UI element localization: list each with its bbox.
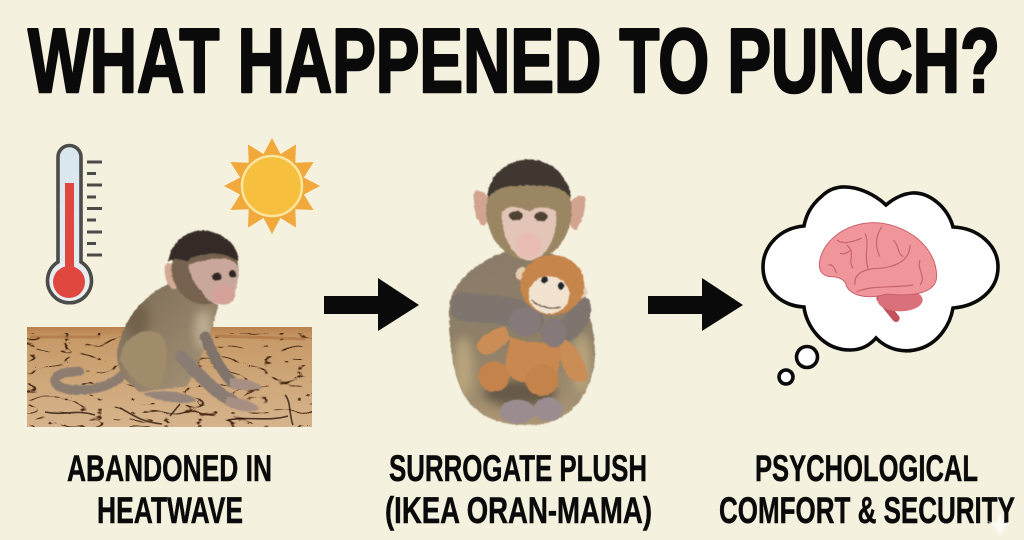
- dry cracked ground: [27, 327, 312, 427]
- label: abandoned in heatwave: [67, 448, 272, 531]
- icon: brain: [819, 223, 937, 318]
- arrow: two: [648, 278, 743, 331]
- panel: abandoned in heatwave: [27, 138, 419, 531]
- label: surrogate plush: (IKEA ORAN-MAMA): [385, 490, 652, 531]
- icon: thought cloud: [763, 187, 998, 384]
- arrow: one: [324, 278, 419, 331]
- label: surrogate plush: [385, 448, 652, 531]
- panel: surrogate plush: [385, 159, 743, 531]
- baby monkey hugging plush: [449, 159, 595, 425]
- baby monkey sitting: [55, 230, 263, 412]
- icon: thermometer: [48, 146, 102, 303]
- panel: psychological comfort: [719, 187, 1015, 536]
- label: abandoned in heatwave: HEATWAVE: [97, 490, 243, 531]
- label: surrogate plush: SURROGATE PLUSH: [389, 448, 647, 489]
- icon: sun: [224, 138, 320, 234]
- label: abandoned in heatwave: ABANDONED IN: [67, 448, 272, 489]
- plush toy: [477, 255, 587, 424]
- label: psychological comfort and security: [719, 448, 1015, 531]
- watermark sparkle: [987, 513, 1013, 536]
